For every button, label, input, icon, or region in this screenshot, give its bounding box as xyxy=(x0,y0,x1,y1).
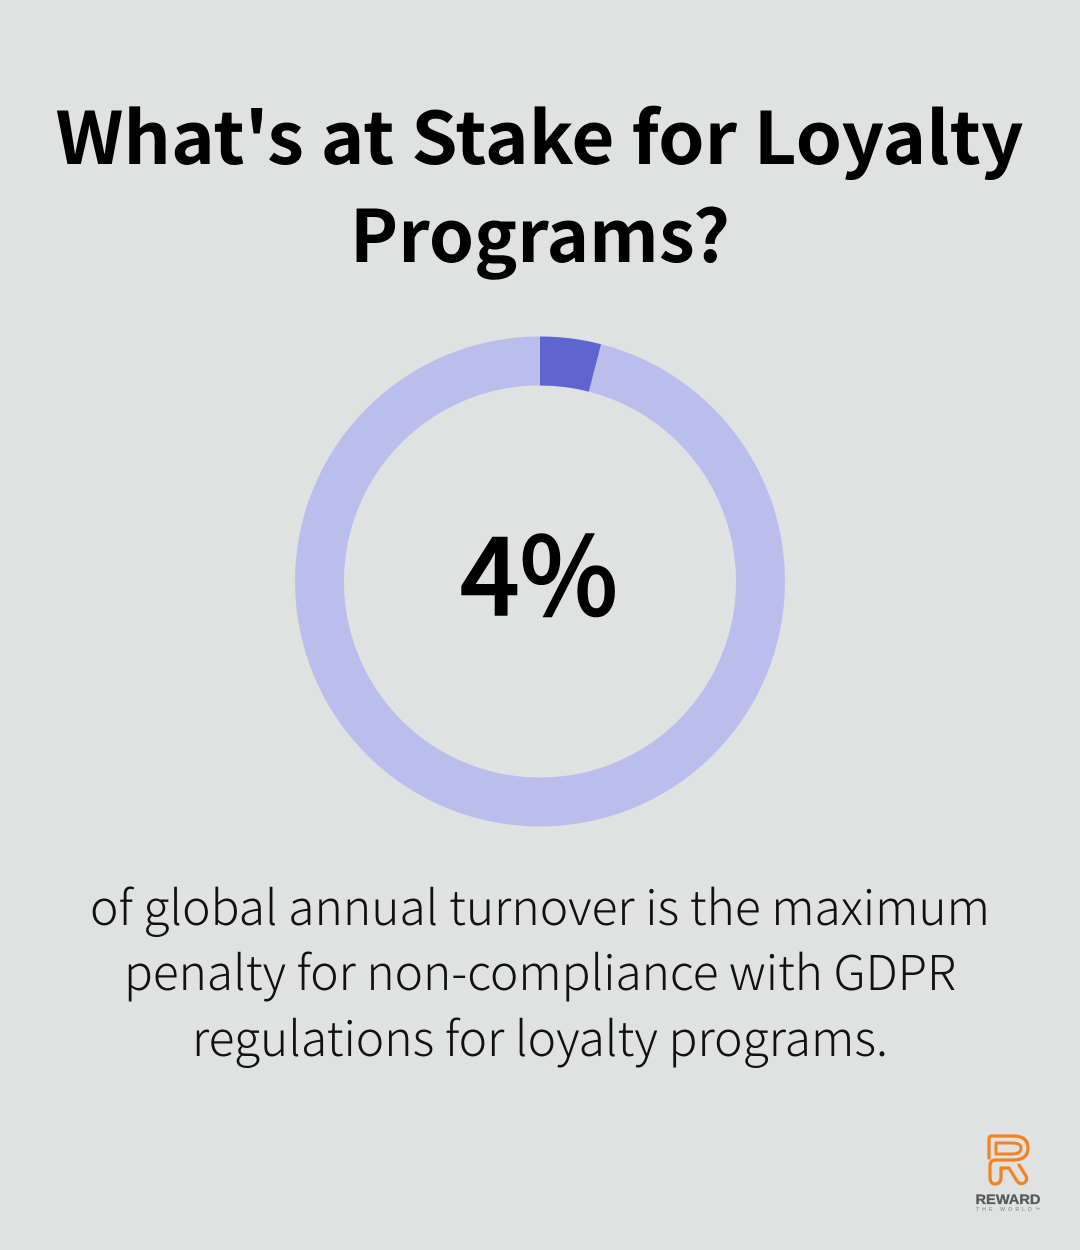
description text: of global annual turnover is the maximum xyxy=(90,869,990,939)
title: What's at Stake for Loyalty xyxy=(56,80,1024,185)
ring: remaining share xyxy=(320,361,760,802)
description text xyxy=(90,869,990,1070)
ring segment: 4% share xyxy=(540,336,601,392)
description text: penalty for non-compliance with GDPR xyxy=(124,934,956,1004)
logo wordmark: REWARD xyxy=(976,1191,1040,1207)
big number: 4% xyxy=(460,491,618,647)
logo: Reward the World xyxy=(976,1136,1040,1213)
donut chart: 4% xyxy=(320,336,760,802)
icon: orange R mark xyxy=(989,1136,1028,1184)
description text: regulations for loyalty programs. xyxy=(192,1000,888,1070)
logo tagline: THE WORLD™ xyxy=(976,1207,1040,1213)
title: Programs? xyxy=(350,178,730,283)
title xyxy=(56,80,1024,283)
